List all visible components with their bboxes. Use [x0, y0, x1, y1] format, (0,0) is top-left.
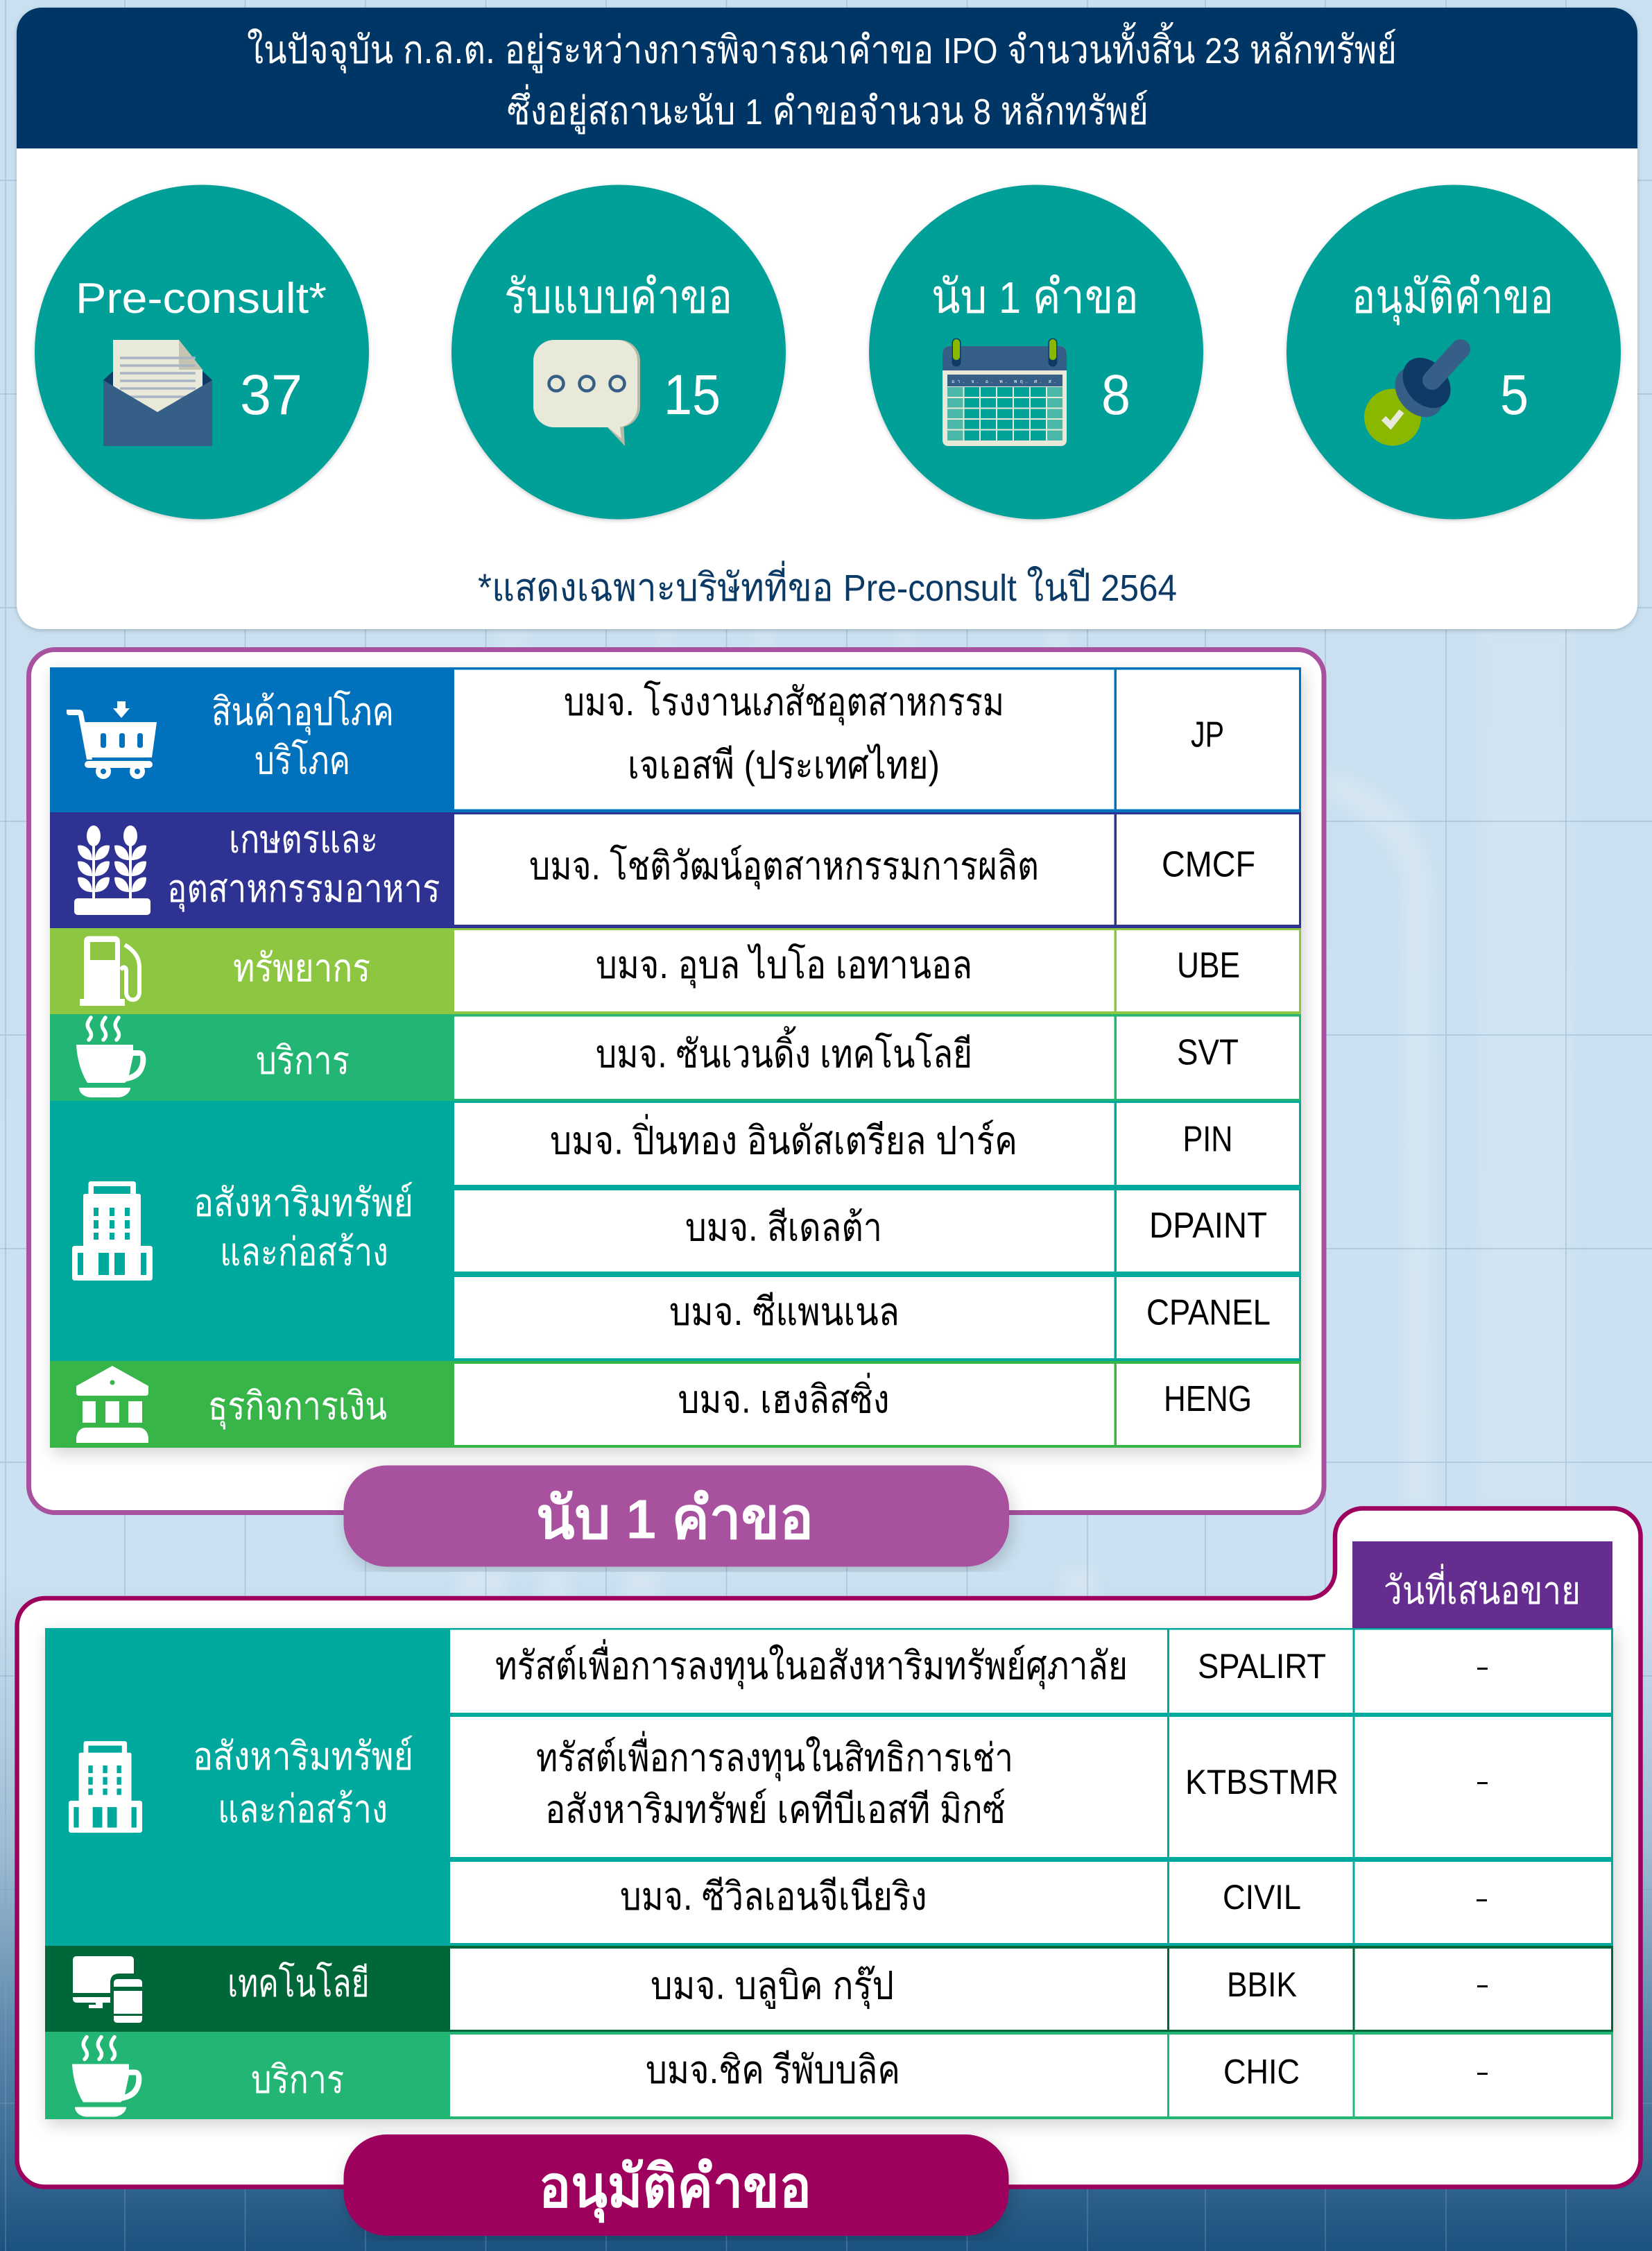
row: agriculture and food: อุตสาหกรรมอาหาร — [167, 866, 440, 912]
row: financials: ธุรกิจการเงิน — [208, 1384, 387, 1430]
stat: filed 8 — [869, 185, 1203, 519]
table: approved applications — [45, 1628, 1613, 2119]
row: property and construction: อสังหาริมทรัพย์ เคทีบีเอสที มิกซ์ — [545, 1787, 1006, 1831]
icon: fuel pump — [80, 936, 139, 1006]
row: services: บริการ — [251, 2057, 344, 2101]
table: filed applications — [50, 667, 1301, 1448]
icon: calendar — [943, 343, 1067, 446]
row: property and construction: อสังหาริมทรัพย์ — [193, 1734, 413, 1778]
row: property and construction: DPAINT — [1149, 1206, 1267, 1246]
row: property and construction: และก่อสร้าง — [218, 1787, 388, 1831]
pill heading: approved — [344, 2134, 1008, 2236]
stat: Pre-consult 37: Pre-consult* — [76, 275, 327, 323]
row: consumer products: สินค้าอุปโภค — [212, 690, 394, 735]
row: services — [72, 2037, 1488, 2117]
stat: Pre-consult 37: 37 — [240, 363, 302, 427]
row: property and construction: บมจ. สีเดลต้า — [685, 1206, 882, 1249]
row: services: SVT — [1177, 1032, 1239, 1072]
row: technology: เทคโนโลยี — [227, 1961, 369, 2005]
row: resources: ทรัพยากร — [233, 946, 370, 989]
stat: form received 15: 15 — [664, 363, 721, 427]
column header: offering date: วันที่เสนอขาย — [1384, 1564, 1581, 1612]
row: property and construction — [69, 1638, 1488, 1918]
stat: filed 8: 8 — [1101, 363, 1130, 427]
icon: speech bubble — [533, 340, 640, 446]
row: property and construction: อสังหาริมทรัพย์ — [193, 1181, 413, 1224]
pill heading: approved: อนุมัติคำขอ — [539, 2154, 811, 2223]
stat: form received 15: รับแบบคำขอ — [504, 271, 732, 323]
row: property and construction: PIN — [1183, 1120, 1233, 1160]
column header: offering date — [1352, 1541, 1612, 1628]
row: services — [76, 1018, 1239, 1097]
icon: bank — [76, 1366, 148, 1443]
icon: building — [69, 1741, 142, 1833]
row: resources — [80, 936, 1240, 1006]
row: agriculture and food: บมจ. โชติวัฒน์อุตสาหกรรมการผลิต — [529, 844, 1039, 889]
stat: Pre-consult 37 — [35, 185, 369, 519]
icon: calendar: อา. จ. อ. พ. พฤ. ศ. ส. — [952, 379, 1056, 384]
row: consumer products: บริโภค — [255, 738, 350, 782]
row: agriculture and food: CMCF — [1162, 845, 1255, 885]
row: technology: บมจ. บลูบิค กรุ๊ป — [651, 1963, 894, 2009]
row: property and construction: บมจ. ซีวิลเอนจีเนียริง — [620, 1874, 927, 1918]
icon: coffee cup — [76, 1018, 146, 1097]
row: property and construction: ทรัสต์เพื่อการลงทุนในอสังหาริมทรัพย์ศุภาลัย — [495, 1638, 1128, 1690]
icon: shopping cart — [67, 701, 157, 779]
row: financials: บมจ. เฮงลิสซิ่ง — [678, 1372, 889, 1421]
footnote: *แสดงเฉพาะบริษัทที่ขอ Pre-consult ในปี 2564 — [478, 560, 1177, 609]
row: agriculture and food: เกษตรและ — [229, 817, 378, 861]
row: financials: HENG — [1164, 1379, 1252, 1419]
row: property and construction: KTBSTMR — [1185, 1763, 1339, 1801]
row: property and construction: บมจ. ซีแพนเนล — [669, 1290, 900, 1333]
row: property and construction — [72, 1114, 1271, 1333]
row: consumer products: บมจ. โรงงานเภสัชอุตสาหกรรม — [564, 680, 1004, 726]
header banner: ในปัจจุบัน ก.ล.ต. อยู่ระหว่างการพิจารณาคำขอ IPO จำนวนทั้งสิ้น 23 หลักทรัพย์ — [247, 22, 1397, 74]
row: property and construction: SPALIRT — [1198, 1647, 1326, 1686]
row: property and construction: ทรัสต์เพื่อการลงทุนในสิทธิการเช่า — [536, 1731, 1013, 1781]
header banner — [17, 8, 1637, 148]
row: property and construction: และก่อสร้าง — [220, 1230, 388, 1274]
icon: coffee cup — [72, 2037, 141, 2117]
row: technology: BBIK — [1227, 1965, 1297, 2004]
row: services: บมจ. ซันเวนดิ้ง เทคโนโลยี — [596, 1027, 972, 1075]
row: consumer products: JP — [1191, 714, 1224, 755]
stat: approved 5 — [1287, 185, 1621, 519]
pill heading: filed — [344, 1465, 1009, 1566]
row: financials — [76, 1366, 1252, 1443]
icon: envelope — [103, 340, 212, 446]
icon: building — [72, 1181, 153, 1281]
row: services: บมจ.ชิค รีพับบลิค — [646, 2048, 900, 2091]
stat: approved 5: อนุมัติคำขอ — [1352, 271, 1554, 325]
header banner: ซึ่งอยู่สถานะนับ 1 คำขอจำนวน 8 หลักทรัพย์ — [507, 84, 1148, 135]
row: agriculture and food — [74, 817, 1255, 915]
row: property and construction: CIVIL — [1223, 1878, 1301, 1917]
pill heading: filed: นับ 1 คำขอ — [536, 1486, 814, 1551]
row: services: บริการ — [256, 1038, 350, 1082]
panel: approved applications — [17, 1508, 1641, 2236]
row: resources: บมจ. อุบล ไบโอ เอทานอล — [596, 943, 972, 988]
stat: filed 8: นับ 1 คำขอ — [931, 271, 1139, 323]
panel: filed applications — [29, 649, 1324, 1566]
stat: approved 5: 5 — [1500, 363, 1529, 427]
icon: computer and phone — [73, 1956, 142, 2023]
stat: form received 15 — [451, 185, 786, 519]
row: consumer products — [67, 680, 1224, 787]
row: property and construction: CPANEL — [1146, 1293, 1271, 1333]
icon: wheat — [74, 825, 150, 915]
row: resources: UBE — [1177, 945, 1240, 986]
row: consumer products: เจเอสพี (ประเทศไทย) — [628, 743, 940, 787]
row: technology — [73, 1956, 1488, 2023]
icon: approval stamp — [1364, 348, 1461, 445]
panel: IPO summary — [17, 8, 1637, 629]
row: property and construction: บมจ. ปิ่นทอง อินดัสเตรียล ปาร์ค — [550, 1114, 1017, 1163]
row: services: CHIC — [1223, 2052, 1300, 2091]
